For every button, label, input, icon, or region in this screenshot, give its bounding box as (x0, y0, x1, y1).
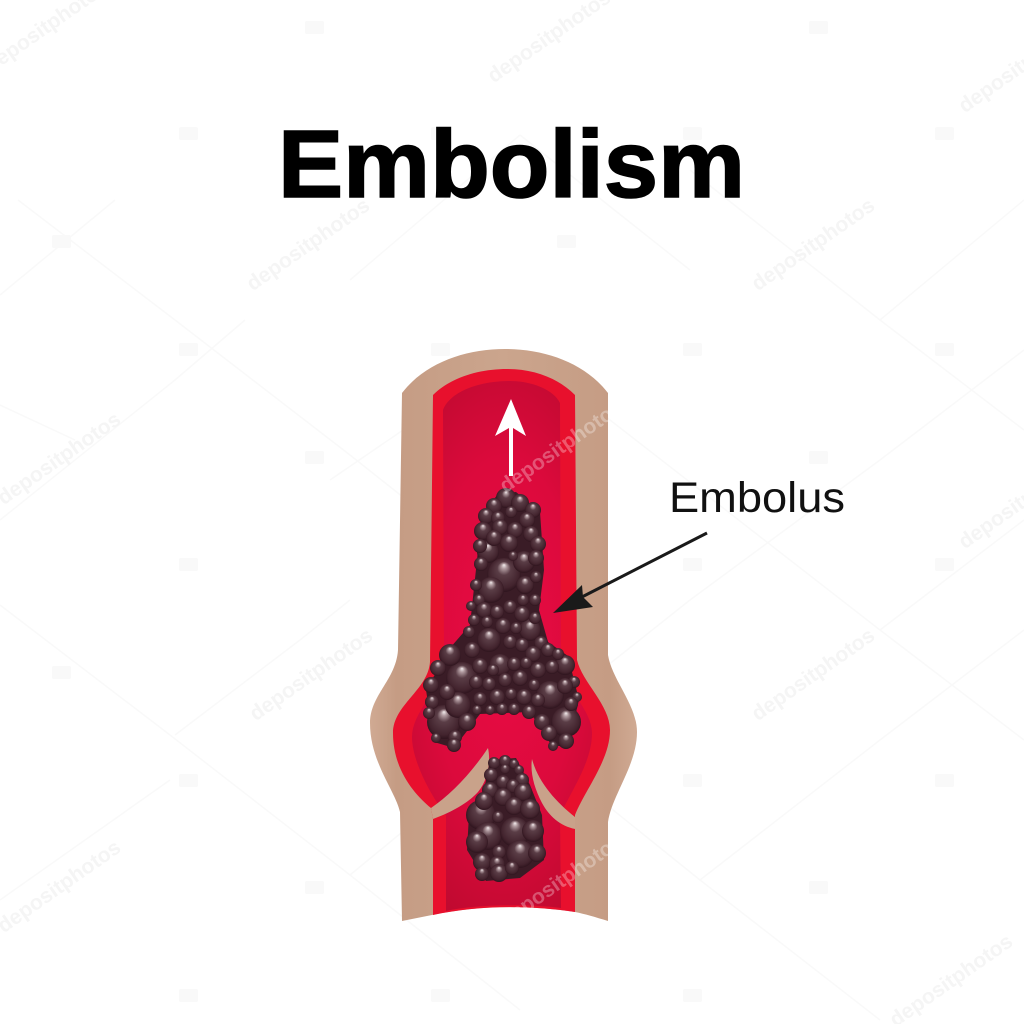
embolus clot lower (466, 755, 546, 882)
white flow arrow (495, 399, 526, 476)
blood vessel diagram (370, 349, 637, 932)
title: Embolism (278, 111, 745, 218)
embolus clot upper (423, 488, 582, 752)
left valve (431, 748, 489, 819)
watermark: depositphotos (747, 194, 879, 296)
callout arrow (553, 533, 707, 613)
watermark over vessel: depositphotos (495, 396, 627, 498)
watermark: depositphotos (747, 624, 879, 726)
lumen outer layer (393, 369, 610, 915)
watermark: depositphotos (245, 624, 377, 726)
watermark over vessel (495, 396, 627, 932)
callout label: Embolus (669, 474, 845, 522)
lumen dark core (412, 381, 592, 911)
watermark over vessel: depositphotos (495, 830, 627, 932)
right valve (531, 759, 575, 829)
watermark: depositphotos (242, 194, 374, 296)
vessel wall (370, 349, 637, 921)
